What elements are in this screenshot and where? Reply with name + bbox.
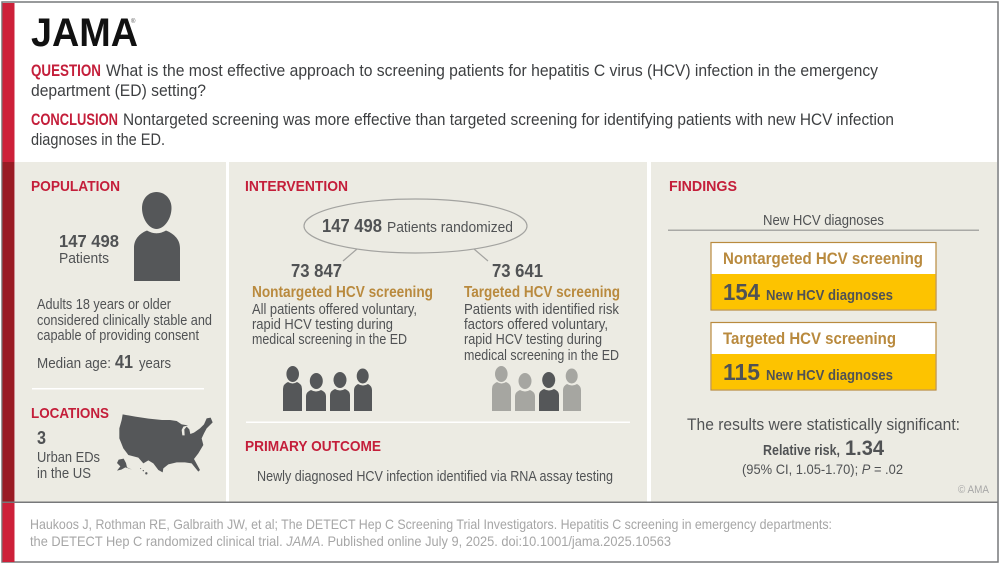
- randomized ellipse: 147 498: [322, 215, 382, 236]
- median age: Median age:: [37, 355, 111, 372]
- heading: findings: FINDINGS: [669, 178, 737, 195]
- result box: nontargeted: New HCV diagnoses: [766, 287, 893, 304]
- arm: targeted: medical screening in the ED: [464, 348, 619, 364]
- icon: patient: [134, 192, 180, 281]
- arm: targeted: Targeted HCV screening: [464, 284, 620, 301]
- panel: findings: [651, 162, 997, 502]
- findings subheading: New HCV diagnoses: [763, 212, 884, 229]
- arrow: split left: [343, 249, 357, 261]
- median age: years: [139, 355, 171, 372]
- icon: US map: [117, 414, 213, 474]
- conclusion: diagnoses in the ED.: [31, 131, 165, 149]
- locations count: 3: [37, 428, 46, 448]
- JAMA logo: JAMA: [31, 11, 138, 55]
- JAMA logo: ®: [131, 18, 136, 25]
- heading: locations: LOCATIONS: [31, 405, 109, 422]
- population description: [37, 297, 212, 344]
- conclusion: [31, 111, 894, 149]
- patient count: Patients: [59, 251, 109, 267]
- patient count: 147 498: [59, 231, 119, 251]
- result box: nontargeted: [711, 242, 936, 310]
- left accent stripe: [2, 3, 14, 562]
- question: What is the most effective approach to screening patients for hepatitis C virus (HCV) infection in the emergency: [106, 62, 879, 80]
- median age: [37, 352, 171, 372]
- copyright: © AMA: [958, 484, 990, 496]
- statistical result: [687, 416, 960, 477]
- primary outcome text: Newly diagnosed HCV infection identified via RNA assay testing: [257, 468, 613, 485]
- citation: the DETECT Hep C randomized clinical trial. JAMA. Published online July 9, 2025. doi:10.1001/jama.2025.10563: [30, 533, 671, 549]
- locations count: in the US: [37, 465, 91, 482]
- citation: [30, 516, 832, 549]
- locations count: [37, 428, 100, 482]
- locations count: Urban EDs: [37, 449, 100, 466]
- result box: targeted: [711, 322, 936, 390]
- result box: targeted: Targeted HCV screening: [723, 329, 896, 348]
- arm: nontargeted: 73 847: [291, 261, 342, 281]
- result box: nontargeted: 154: [723, 279, 760, 305]
- arm: targeted: 73 641: [492, 261, 543, 281]
- population description: considered clinically stable and: [37, 313, 212, 329]
- arm: nontargeted: [252, 261, 433, 348]
- randomized ellipse: [304, 199, 527, 253]
- statistical result: The results were statistically significant:: [687, 416, 960, 434]
- citation: Haukoos J, Rothman RE, Galbraith JW, et al; The DETECT Hep C Screening Trial Investigators. Hepatitis C screening in emergency departments:: [30, 516, 832, 532]
- result box: nontargeted: Nontargeted HCV screening: [723, 249, 923, 268]
- panel: population and locations: [15, 162, 226, 502]
- icon: targeted group, one tested: [492, 366, 581, 411]
- arm: nontargeted: medical screening in the ED: [252, 332, 407, 348]
- population description: Adults 18 years or older: [37, 297, 171, 313]
- question: [31, 62, 879, 100]
- arm: targeted: Patients with identified risk: [464, 302, 620, 318]
- statistical result: 1.34: [845, 437, 884, 460]
- arm: nontargeted: Nontargeted HCV screening: [252, 284, 433, 301]
- panel: intervention and primary outcome: [229, 162, 647, 502]
- arrow: split right: [474, 249, 488, 261]
- median age: 41: [115, 352, 133, 372]
- icon: nontargeted group, all tested: [283, 366, 372, 411]
- population description: capable of providing consent: [37, 328, 199, 344]
- arm: nontargeted: All patients offered voluntary,: [252, 302, 417, 318]
- result box: targeted: New HCV diagnoses: [766, 367, 893, 384]
- statistical result: Relative risk,: [763, 443, 840, 459]
- arm: nontargeted: rapid HCV testing during: [252, 317, 393, 333]
- patient count: [59, 231, 119, 267]
- heading: primary outcome: PRIMARY OUTCOME: [245, 438, 381, 455]
- arm: targeted: factors offered voluntary,: [464, 317, 608, 333]
- question: department (ED) setting?: [31, 82, 206, 100]
- question: QUESTION: [31, 62, 101, 80]
- arm: targeted: [464, 261, 620, 364]
- conclusion: Nontargeted screening was more effective than targeted screening for identifying patients with new HCV infection: [123, 111, 894, 129]
- randomized ellipse: Patients randomized: [387, 219, 513, 236]
- conclusion: CONCLUSION: [31, 111, 118, 129]
- statistical result: (95% CI, 1.05-1.70); P = .02: [742, 461, 903, 477]
- heading: population: POPULATION: [31, 178, 120, 195]
- arm: targeted: rapid HCV testing during: [464, 332, 602, 348]
- result box: targeted: 115: [723, 359, 760, 385]
- heading: intervention: INTERVENTION: [245, 178, 348, 195]
